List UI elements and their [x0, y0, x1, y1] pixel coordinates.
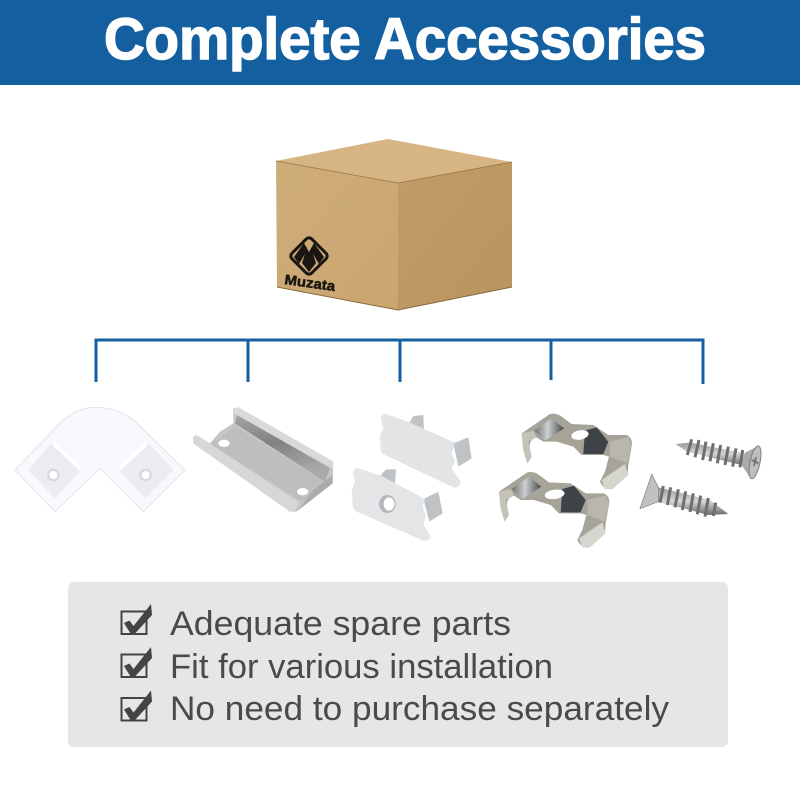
- feature text 1: Adequate spare parts: [170, 605, 511, 643]
- part: metal spring clips: [499, 414, 632, 548]
- part: white corner connector: [15, 407, 185, 512]
- top end cap: [380, 414, 472, 487]
- part: end caps: [352, 414, 472, 541]
- icon: Muzata logo mark: [289, 236, 329, 276]
- feature text 2: Fit for various installation: [170, 648, 553, 686]
- header banner: [0, 0, 800, 85]
- bottom end cap: [352, 468, 443, 541]
- title: Complete Accessories: [104, 7, 706, 72]
- panel: feature list: [68, 582, 728, 747]
- top clip: [522, 414, 632, 489]
- bottom clip: [499, 472, 609, 548]
- feature text 3: No need to purchase separately: [170, 690, 669, 728]
- top screw: [676, 439, 763, 480]
- part: aluminium mounting rail: [193, 407, 333, 512]
- cardboard box with Muzata logo: [276, 139, 512, 310]
- part: screws: [640, 439, 763, 517]
- icon: checkbox 2: [122, 647, 152, 677]
- icon: checkbox 1: [122, 604, 152, 634]
- connector bracket: [96, 340, 703, 384]
- bottom screw: [640, 474, 728, 517]
- icon: checkbox 3: [122, 690, 152, 720]
- logo wordmark: Muzata: [284, 271, 337, 294]
